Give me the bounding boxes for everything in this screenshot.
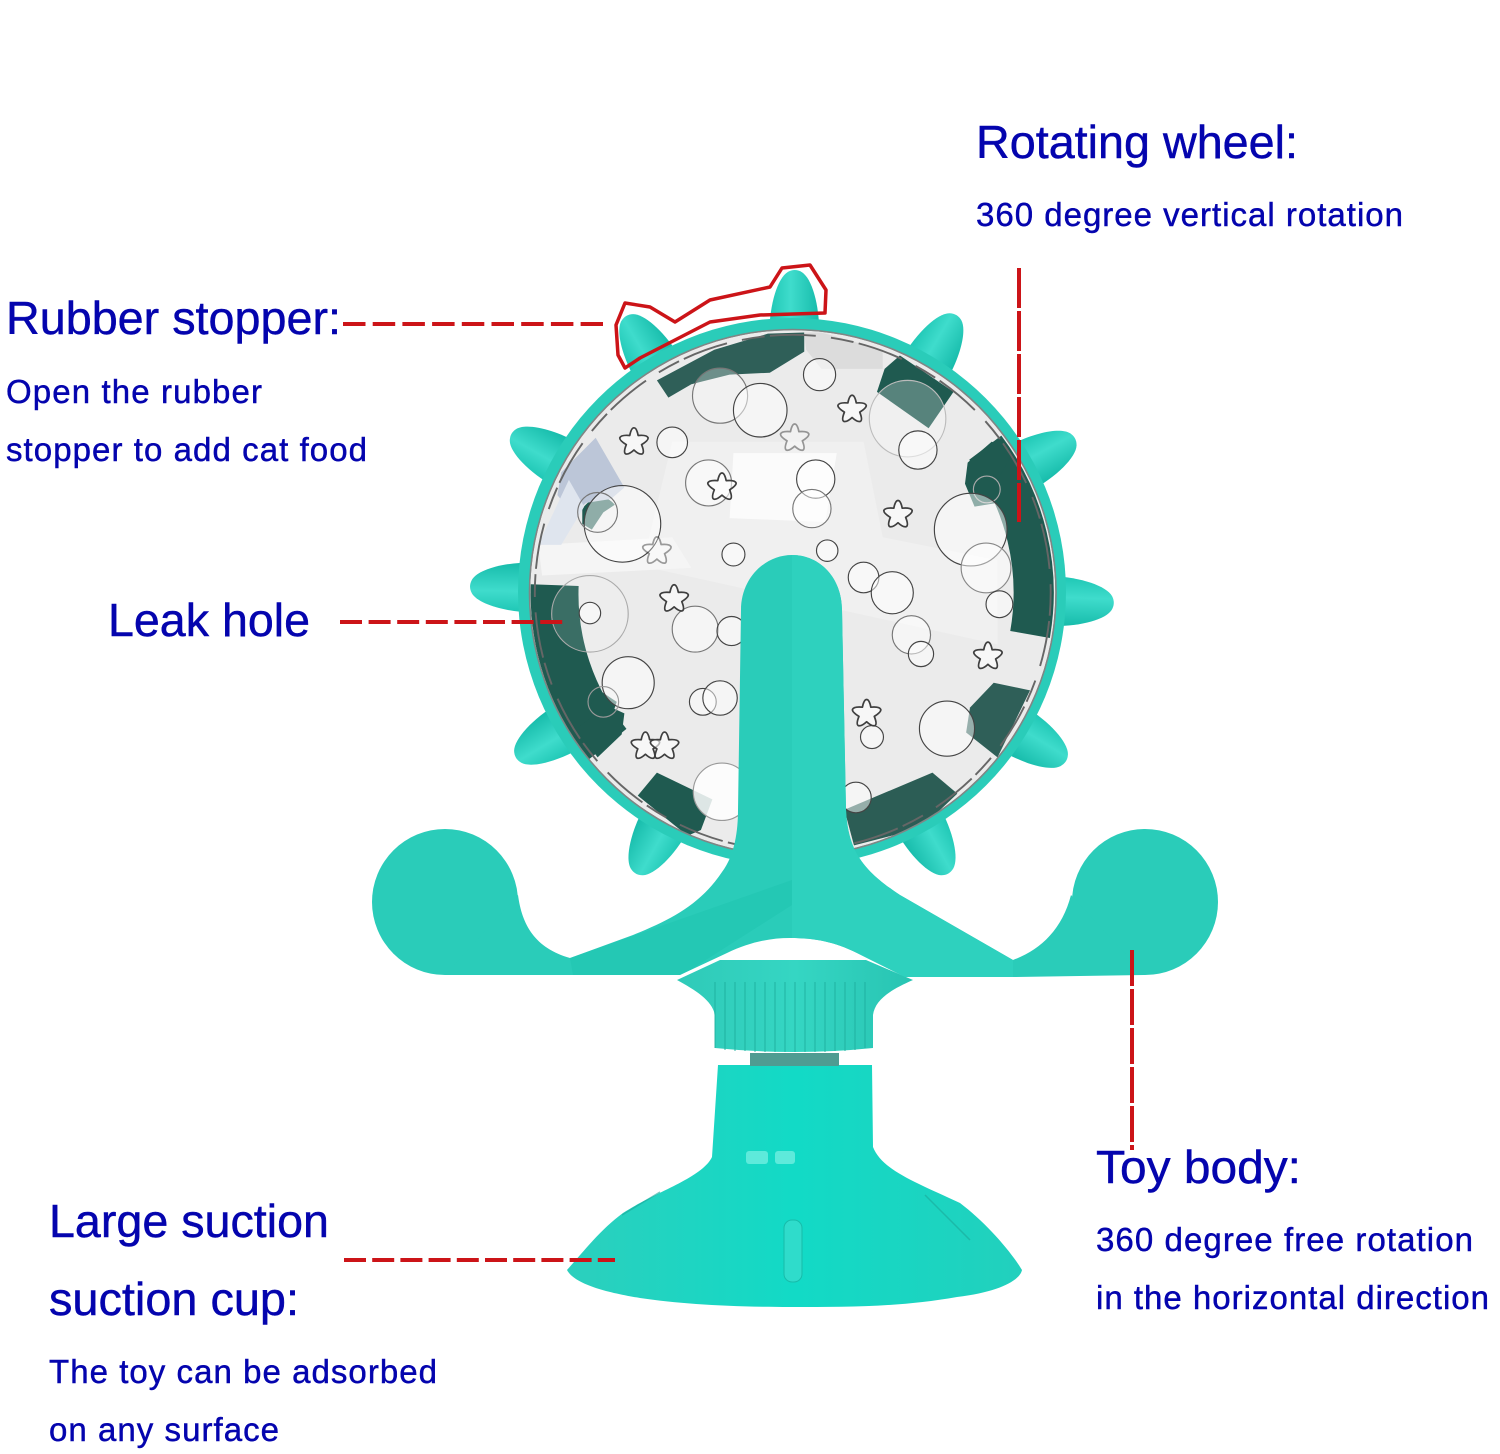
leader line: leak hole — [340, 620, 566, 624]
label: rotating wheel: Rotating wheel: — [976, 116, 1298, 168]
label: large suction cup: suction cup: — [49, 1273, 299, 1325]
label: leak hole: Leak hole — [108, 594, 310, 646]
label: rotating wheel — [976, 116, 1403, 233]
label: large suction cup — [49, 1195, 437, 1448]
label: toy body — [1096, 1141, 1489, 1316]
label: rubber stopper — [6, 292, 367, 468]
callout: rubber stopper outline — [616, 265, 826, 368]
label: large suction cup: The toy can be adsorbed — [49, 1353, 437, 1390]
leader line: suction cup — [344, 1258, 615, 1262]
wheel rim — [518, 318, 1066, 866]
leader line: rotating wheel — [1017, 268, 1021, 522]
label: rubber stopper: Open the rubber — [6, 373, 262, 410]
suction cup base — [567, 1065, 1022, 1307]
stand with paddles — [372, 555, 1218, 977]
wheel spikes — [470, 270, 1115, 886]
label: rubber stopper: stopper to add cat food — [6, 431, 367, 468]
ribbed knob — [677, 960, 913, 1052]
neck — [750, 1053, 839, 1066]
leader line: rubber stopper — [343, 322, 603, 326]
label: large suction cup: Large suction — [49, 1195, 329, 1247]
label: toy body: 360 degree free rotation — [1096, 1221, 1473, 1258]
label: toy body: in the horizontal direction — [1096, 1279, 1489, 1316]
icon: cat toy wheel — [372, 270, 1218, 1307]
label: toy body: Toy body: — [1096, 1141, 1301, 1193]
label: large suction cup: on any surface — [49, 1411, 279, 1448]
label: rotating wheel: 360 degree vertical rotation — [976, 196, 1403, 233]
wheel glass with bubbles — [529, 329, 1057, 857]
label: rubber stopper: Rubber stopper: — [6, 292, 341, 344]
leader line: toy body — [1130, 950, 1134, 1150]
